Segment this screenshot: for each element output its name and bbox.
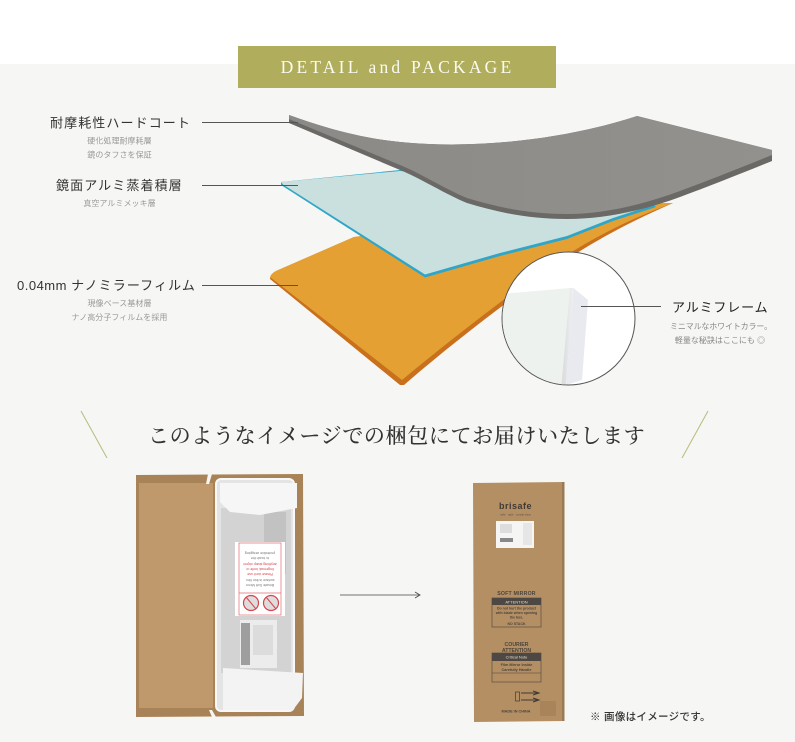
soft mirror notice: Do not hurt the product bbox=[497, 606, 537, 610]
warning sticker: to touch the bbox=[251, 556, 269, 560]
gray hard coat layer bbox=[289, 115, 772, 219]
label: hard coat: 耐摩耗性ハードコート bbox=[50, 116, 191, 130]
courier notice: ATTENTION bbox=[502, 648, 531, 654]
label: aluminium frame: ミニマルなホワイトカラー。 bbox=[670, 322, 772, 331]
label: aluminium deposit bbox=[56, 178, 298, 208]
label: aluminium frame bbox=[581, 300, 772, 345]
warning sticker: surface is thin film. bbox=[245, 578, 274, 582]
warning sticker: fingernail, knife or bbox=[245, 567, 274, 571]
top notch bbox=[206, 474, 212, 484]
layered mirror diagram bbox=[270, 115, 772, 385]
soft mirror notice: ATTENTION bbox=[505, 600, 528, 604]
label: aluminium deposit: 鏡面アルミ蒸着積層 bbox=[56, 178, 183, 193]
label: hard coat: 鏡のタフさを保証 bbox=[87, 150, 152, 160]
photo: open box bbox=[136, 474, 304, 717]
handling arrows bbox=[516, 691, 539, 702]
cardboard frame bbox=[136, 474, 304, 717]
teal aluminium layer bbox=[281, 170, 656, 278]
warning sticker bbox=[235, 542, 285, 616]
note: ※ 画像はイメージです。 bbox=[590, 710, 711, 723]
soft mirror notice: NO STACK bbox=[507, 622, 526, 626]
photo: closed box bbox=[473, 482, 564, 722]
magnified circle: aluminium frame bbox=[500, 252, 635, 385]
instruction leaflet bbox=[240, 620, 277, 668]
label: nano mirror film bbox=[17, 278, 298, 322]
label: nano mirror film: ナノ高分子フィルムを採用 bbox=[72, 312, 167, 322]
arrow bbox=[340, 592, 420, 598]
label: nano mirror film: 現像ベース基材層 bbox=[88, 298, 152, 308]
heading: packaging: このようなイメージでの梱包にてお届けいたします bbox=[148, 424, 645, 448]
bottom notch bbox=[209, 710, 216, 717]
soft mirror notice: SOFT MIRROR bbox=[497, 591, 536, 597]
warning sticker: anything sharp object bbox=[243, 562, 277, 566]
left flap bbox=[139, 483, 213, 708]
label: hard coat bbox=[50, 116, 298, 160]
soft mirror notice: the box. bbox=[510, 616, 523, 620]
soft mirror notice: with blade when opening bbox=[495, 611, 537, 615]
courier notice: Film Mirror Inside bbox=[501, 663, 532, 667]
warning sticker: Brisafe Soft Mirror bbox=[245, 583, 274, 587]
brand tagline: safe · right · crystal clear bbox=[500, 512, 531, 516]
bottom wrap bbox=[223, 668, 303, 710]
brand logo: brisafe bbox=[499, 501, 532, 511]
soft mirror notice bbox=[492, 591, 541, 627]
tray bbox=[216, 479, 294, 711]
courier notice: Critical Note bbox=[506, 654, 528, 660]
courier notice bbox=[492, 642, 541, 682]
label: aluminium frame: アルミフレーム bbox=[672, 300, 768, 315]
mirror under wrap bbox=[221, 508, 291, 673]
courier notice: Carefully Handle bbox=[502, 668, 531, 672]
label: nano mirror film: 0.04mm ナノミラーフィルム bbox=[17, 278, 196, 293]
courier notice: COURIER bbox=[505, 642, 529, 648]
orange film layer bbox=[270, 203, 673, 385]
banner: DETAIL and PACKAGE bbox=[238, 46, 556, 88]
made in china: MADE IN CHINA bbox=[501, 710, 531, 714]
label: hard coat: 硬化処理耐摩耗層 bbox=[87, 136, 152, 146]
decorative slash left bbox=[81, 411, 107, 458]
decorative slash right bbox=[682, 411, 708, 458]
top wrap bbox=[220, 483, 297, 515]
label: aluminium frame: 軽量な秘訣はここにも ◎ bbox=[675, 335, 765, 345]
warning sticker: Please don't use bbox=[247, 572, 273, 576]
shipping label bbox=[496, 521, 534, 548]
warning sticker: protective wrapping bbox=[245, 551, 275, 555]
label: aluminium deposit: 真空アルミメッキ層 bbox=[83, 198, 156, 208]
banner: DETAIL and PACKAGE: DETAIL and PACKAGE bbox=[281, 57, 514, 77]
